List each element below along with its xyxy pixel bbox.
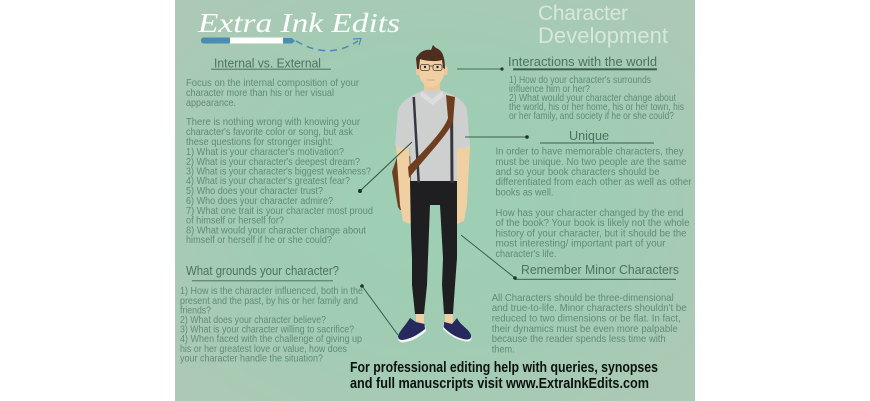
hair (416, 45, 445, 69)
bag (392, 156, 411, 210)
text block: internal composition: 4) What is your character's greatest fear? (186, 176, 350, 187)
text block: grounding questions (180, 286, 363, 364)
text block: grounding questions: 1) How is the character influenced, both in the (180, 286, 363, 297)
illustration: standing character (392, 45, 471, 342)
text block: unique characters: books as well. (496, 188, 554, 198)
text block: internal composition: 6) Who does your character admire? (186, 196, 333, 207)
heading: Remember Minor Characters: Remember Minor Characters (521, 262, 679, 277)
text block: internal composition: 3) What is your character's biggest weakness? (186, 166, 371, 178)
text block: grounding questions: his or her greatest love or value, how does (180, 344, 347, 355)
text block: internal composition: Focus on the internal composition of your (186, 78, 360, 89)
callout: professional editing: For professional editing help with queries, synopses (350, 360, 658, 376)
text block: world questions: 1) How do your character's surrounds (509, 75, 651, 86)
text block: internal composition: 2) What is your character's deepest dream? (186, 157, 360, 168)
text block: grounding questions: present and the past, by his or her family and (180, 296, 358, 307)
text block: internal composition (186, 78, 373, 246)
heading: Unique: Unique (569, 128, 609, 143)
text block: minor characters: reduced to two dimensions or be flat. In fact, (492, 314, 681, 324)
text block: world questions: influence him or her? (509, 84, 590, 95)
text block: internal composition: 7) What one trait is your character most proud (186, 206, 373, 217)
logo: Extra Ink Edits: Extra Ink Edits (197, 8, 400, 38)
text block: unique characters: and so your book characters should be (496, 167, 660, 178)
title: Character Development: Development (538, 23, 668, 48)
text block: unique characters: differentiated from each other as well as other (496, 177, 692, 188)
leader line: Unique (465, 135, 529, 139)
text block: minor characters: because the reader spends less time with (492, 334, 666, 345)
text block: unique characters: In order to have memorable characters, they (496, 146, 684, 158)
panel: Internal vs. External (186, 56, 373, 246)
heading: Unique (540, 128, 654, 144)
text block: unique characters (496, 146, 692, 260)
glasses (420, 64, 442, 70)
text block: minor characters: and true-to-life. Minor characters shouldn't be (492, 303, 687, 314)
text block: world questions: the world, his or her home, his or her town, his (509, 102, 684, 113)
shirt (395, 90, 470, 183)
text block: minor characters: them. (492, 344, 515, 356)
shoes (398, 319, 426, 342)
title: Character Development (538, 2, 668, 48)
callout: professional editing: and full manuscripts visit www.ExtraInkEdits.com (350, 376, 649, 392)
title: Character Development: Character (538, 2, 628, 25)
logo: Extra Ink Edits (197, 8, 400, 51)
leader line: What grounds (360, 284, 398, 335)
text block: internal composition: himself or herself if he or she could? (186, 235, 332, 246)
text block: world questions: or her family, and society if he or she could? (509, 111, 674, 122)
text block: internal composition: 5) Who does your character trust? (186, 186, 323, 197)
text block: minor characters (492, 293, 687, 356)
text block: internal composition: character's favorite color or song, but ask (186, 127, 354, 138)
neck (424, 83, 440, 97)
callout: professional editing (350, 360, 658, 392)
text block: internal composition: character more than his or her visual (186, 88, 334, 99)
text block: minor characters: their dynamics must be even more palpable (492, 324, 678, 335)
text block: unique characters: How has your character changed by the end (496, 208, 684, 219)
text block: internal composition: There is nothing wrong with knowing your (186, 117, 361, 128)
text block: internal composition: 1) What is your character's motivation? (186, 147, 344, 158)
text block: unique characters: of the book? Your book is likely not the whole (496, 218, 690, 229)
leader line: Interactions (457, 67, 504, 71)
text block: minor characters: All Characters should be three-dimensional (492, 293, 674, 304)
text block: unique characters: character's life. (496, 249, 556, 260)
text block: grounding questions: your character handle the situation? (180, 354, 323, 364)
text block: grounding questions: friends? (180, 306, 211, 316)
text block: world questions: 2) What would your character change about (509, 93, 676, 104)
text block: internal composition: 8) What would your character change about (186, 226, 366, 236)
text block: grounding questions: 3) What is your character willing to sacrifice? (180, 324, 354, 336)
suspenders (412, 97, 420, 183)
text block: grounding questions: 4) When faced with the challenge of giving up (180, 334, 362, 345)
text block: unique characters: most interesting/ important part of your (496, 238, 666, 250)
heading: Internal vs. External: Internal vs. External (214, 56, 321, 70)
text block: grounding questions: 2) What does your character believe? (180, 315, 326, 326)
leader line: Internal vs. External (358, 142, 412, 193)
heading: Interactions with the world: Interactions with the world (508, 54, 657, 69)
strap (408, 95, 455, 178)
text block: world questions (509, 75, 684, 122)
text block: internal composition: of himself or herself for? (186, 216, 284, 226)
text block: unique characters: history of your character, but it should be the (496, 228, 687, 240)
panel: Interactions with the world (508, 54, 684, 122)
text block: unique characters: must be unique. No two people are the same (496, 157, 687, 168)
ankles (416, 314, 424, 325)
panel: Unique (496, 128, 692, 260)
head (419, 60, 444, 87)
background panel (175, 0, 695, 401)
text block: internal composition: these questions for stronger insight: (186, 137, 333, 148)
panel: Remember Minor Characters (492, 262, 687, 356)
text block: internal composition: appearance. (186, 98, 236, 109)
panel: What grounds your character? (180, 263, 363, 364)
arms (396, 146, 413, 224)
trousers (410, 181, 457, 314)
leader line: Minor Characters (461, 235, 517, 280)
heading: What grounds your character?: What grounds your character? (186, 263, 339, 278)
